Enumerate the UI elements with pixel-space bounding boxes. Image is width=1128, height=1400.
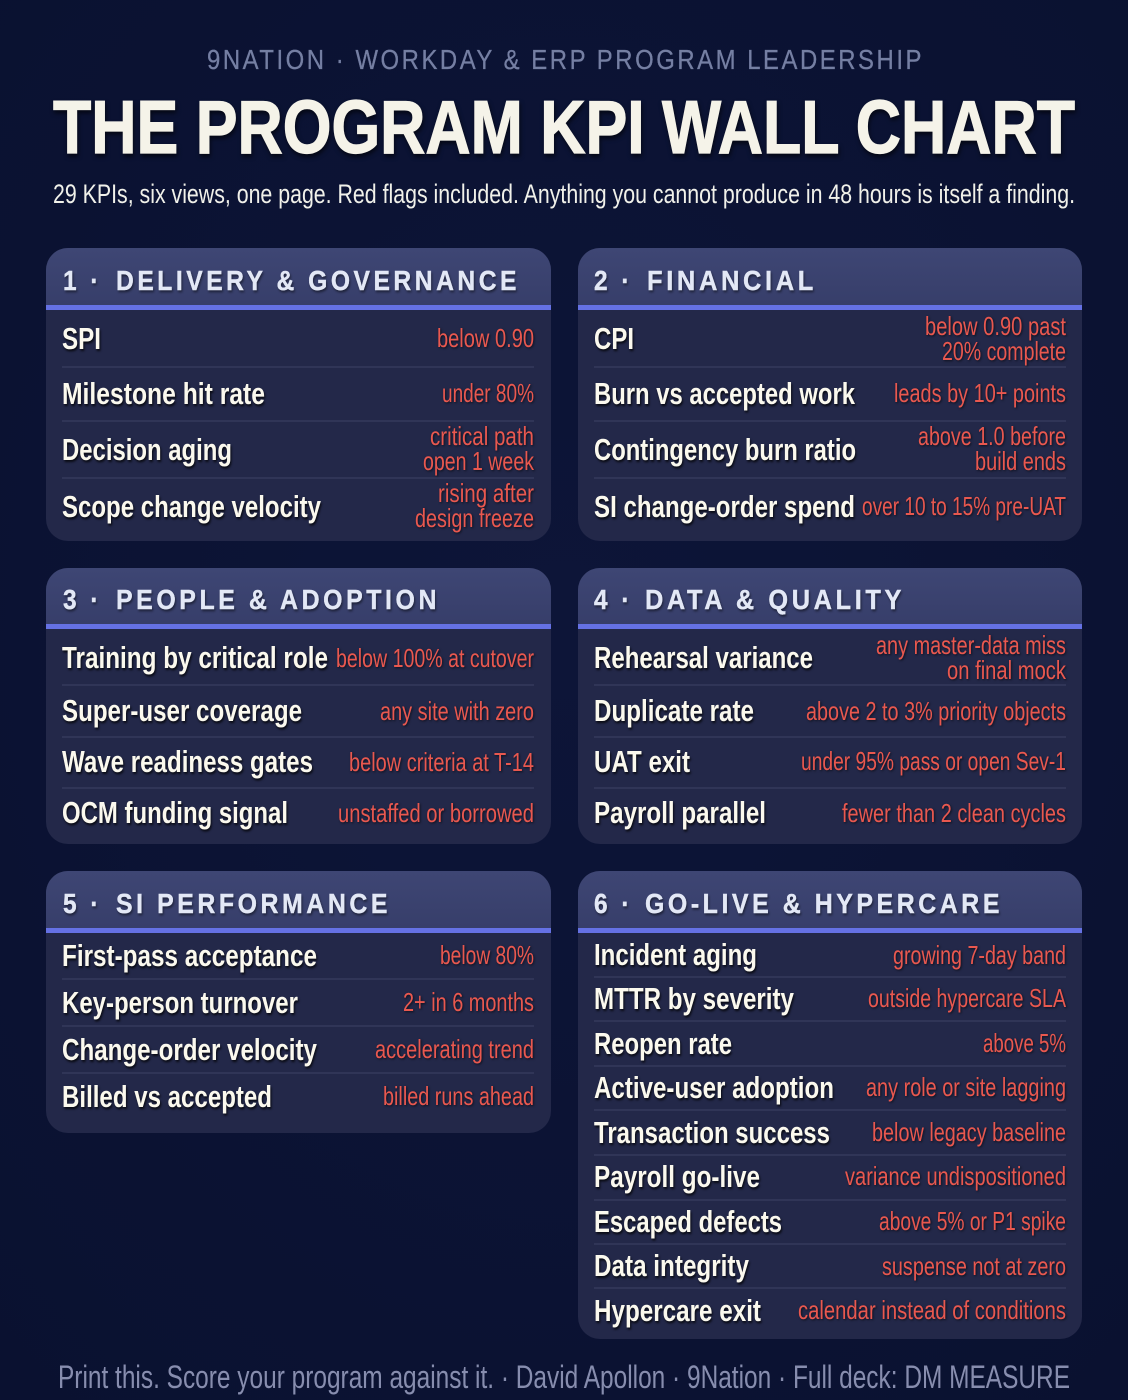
row: incident aging (594, 937, 1066, 972)
panel: go-live and hypercare (578, 871, 1082, 1339)
row: hypercare exit: Hypercare exit (594, 1293, 761, 1328)
panel 3 background (46, 568, 551, 844)
row: hypercare exit (594, 1293, 1066, 1328)
row: active-user adoption (594, 1070, 1066, 1105)
panel 1 accent bar (46, 305, 551, 310)
panel: data and quality (578, 568, 1082, 844)
panel 5 header band (46, 871, 551, 928)
row: CPI: CPI (594, 321, 634, 356)
row: active-user adoption: any role or site lagging (866, 1072, 1066, 1102)
row: first-pass acceptance: First-pass acceptance (62, 938, 317, 973)
row: duplicate rate (594, 693, 1066, 728)
row: transaction success: Transaction success (594, 1115, 830, 1150)
row: scope change velocity: Scope change velocity (62, 489, 322, 524)
panel 2 header band (578, 248, 1082, 305)
panel 4 heading: 4 · (594, 584, 633, 615)
row: payroll parallel: Payroll parallel (594, 795, 766, 830)
row: reopen rate: above 5% (983, 1028, 1066, 1058)
row: CPI (594, 311, 1067, 366)
row: decision aging: open 1 week (423, 446, 535, 476)
row: scope change velocity (62, 478, 534, 533)
row: wave readiness gates: Wave readiness gates (62, 744, 313, 779)
row: billed vs accepted: Billed vs accepted (62, 1079, 272, 1114)
row: payroll go-live (594, 1159, 1066, 1194)
row: reopen rate: Reopen rate (594, 1026, 732, 1061)
panel 6 heading: GO-LIVE & HYPERCARE (645, 888, 1003, 919)
panel: delivery and governance (46, 248, 551, 541)
panel 1 heading: 1 · (63, 265, 102, 296)
row: transaction success (594, 1115, 1066, 1150)
panel 3 heading: 3 · (63, 584, 102, 615)
panel 3 heading: PEOPLE & ADOPTION (116, 584, 440, 615)
row: key-person turnover: Key-person turnover (62, 985, 298, 1020)
row: escaped defects (594, 1204, 1066, 1239)
panel 6 background (578, 871, 1082, 1339)
row: billed vs accepted (62, 1079, 534, 1114)
panel: people and adoption (46, 568, 551, 844)
panel 2 heading: FINANCIAL (647, 265, 817, 296)
row: CPI: 20% complete (942, 336, 1066, 366)
row: payroll parallel: fewer than 2 clean cycles (842, 798, 1066, 828)
row: key-person turnover (62, 985, 534, 1020)
row: SI change-order spend: SI change-order spend (594, 489, 855, 524)
row: duplicate rate: Duplicate rate (594, 693, 754, 728)
row: MTTR by severity (594, 981, 1066, 1016)
row: data integrity (594, 1248, 1066, 1283)
row: change-order velocity (62, 1032, 534, 1067)
panel 3 header band (46, 568, 551, 624)
row: transaction success: below legacy baseline (872, 1117, 1066, 1147)
row: payroll parallel (594, 795, 1066, 830)
row: wave readiness gates: below criteria at T-14 (349, 747, 534, 777)
panel 5 accent bar (46, 928, 551, 933)
row: milestone hit rate: under 80% (442, 378, 534, 408)
row: contingency burn ratio: Contingency burn ratio (594, 432, 856, 467)
row: SPI: below 0.90 (437, 323, 534, 353)
row: contingency burn ratio (594, 421, 1066, 476)
panel 5 heading: 5 · (63, 888, 102, 919)
row: training by critical role: Training by critical role (62, 640, 328, 675)
row: contingency burn ratio: build ends (975, 446, 1066, 476)
panel: SI performance (46, 871, 551, 1133)
panel 1 heading: DELIVERY & GOVERNANCE (116, 265, 520, 296)
row: rehearsal variance: any master-data miss (876, 630, 1066, 660)
panel 2 heading: 2 · (594, 265, 633, 296)
panel 6 accent bar (578, 928, 1082, 933)
row: super-user coverage: any site with zero (380, 696, 534, 726)
row: SPI: SPI (62, 321, 101, 356)
panel 3 accent bar (46, 624, 551, 629)
panel 5 background (46, 871, 551, 1133)
panel 4 heading: DATA & QUALITY (645, 584, 905, 615)
panel: financial (578, 248, 1082, 541)
row: super-user coverage (62, 693, 534, 728)
panel 5 heading: SI PERFORMANCE (116, 888, 391, 919)
panel 6 header band (578, 871, 1082, 928)
row: incident aging: growing 7-day band (893, 940, 1066, 970)
row: MTTR by severity: MTTR by severity (594, 981, 795, 1016)
row: OCM funding signal: unstaffed or borrowed (338, 798, 534, 828)
row: escaped defects: above 5% or P1 spike (879, 1206, 1066, 1236)
row: wave readiness gates (62, 744, 534, 779)
panel 4 header band (578, 568, 1082, 624)
row: first-pass acceptance: below 80% (440, 940, 534, 970)
row: burn vs accepted work: leads by 10+ points (894, 378, 1066, 408)
panel 1 background (46, 248, 551, 541)
row: OCM funding signal: OCM funding signal (62, 795, 288, 830)
row: data integrity: Data integrity (594, 1248, 750, 1283)
row: rehearsal variance: on final mock (947, 655, 1067, 685)
row: MTTR by severity: outside hypercare SLA (868, 983, 1066, 1013)
row: decision aging (62, 421, 535, 476)
row: scope change velocity: design freeze (415, 503, 534, 533)
row: UAT exit: UAT exit (594, 744, 690, 779)
row: scope change velocity: rising after (438, 478, 534, 508)
row: rehearsal variance (594, 630, 1067, 685)
row: training by critical role: below 100% at cutover (336, 643, 534, 673)
row: payroll go-live: variance undispositioned (845, 1161, 1066, 1191)
row: escaped defects: Escaped defects (594, 1204, 782, 1239)
row: contingency burn ratio: above 1.0 before (918, 421, 1066, 451)
row: change-order velocity: accelerating trend (375, 1034, 534, 1064)
row: SPI (62, 321, 534, 356)
row: UAT exit (594, 744, 1066, 779)
row: billed vs accepted: billed runs ahead (383, 1081, 534, 1111)
panel 6 heading: 6 · (594, 888, 633, 919)
row: super-user coverage: Super-user coverage (62, 693, 302, 728)
row: first-pass acceptance (62, 938, 534, 973)
panel 4 accent bar (578, 624, 1082, 629)
eyebrow: 9NATION · WORKDAY & ERP PROGRAM LEADERSHIP (207, 44, 924, 75)
row: burn vs accepted work: Burn vs accepted work (594, 376, 856, 411)
row: active-user adoption: Active-user adoption (594, 1070, 834, 1105)
row: milestone hit rate (62, 376, 534, 411)
panel 2 accent bar (578, 305, 1082, 310)
panel 1 header band (46, 248, 551, 305)
panel 2 background (578, 248, 1082, 541)
row: change-order velocity: Change-order velocity (62, 1032, 318, 1067)
row: data integrity: suspense not at zero (882, 1251, 1066, 1281)
row: payroll go-live: Payroll go-live (594, 1159, 760, 1194)
row: OCM funding signal (62, 795, 534, 830)
row: decision aging: critical path (430, 421, 534, 451)
row: milestone hit rate: Milestone hit rate (62, 376, 265, 411)
row: rehearsal variance: Rehearsal variance (594, 640, 813, 675)
row: reopen rate (594, 1026, 1066, 1061)
row: key-person turnover: 2+ in 6 months (403, 987, 534, 1017)
row: decision aging: Decision aging (62, 432, 232, 467)
panel 4 background (578, 568, 1082, 844)
row: CPI: below 0.90 past (925, 311, 1067, 341)
row: incident aging: Incident aging (594, 937, 757, 972)
